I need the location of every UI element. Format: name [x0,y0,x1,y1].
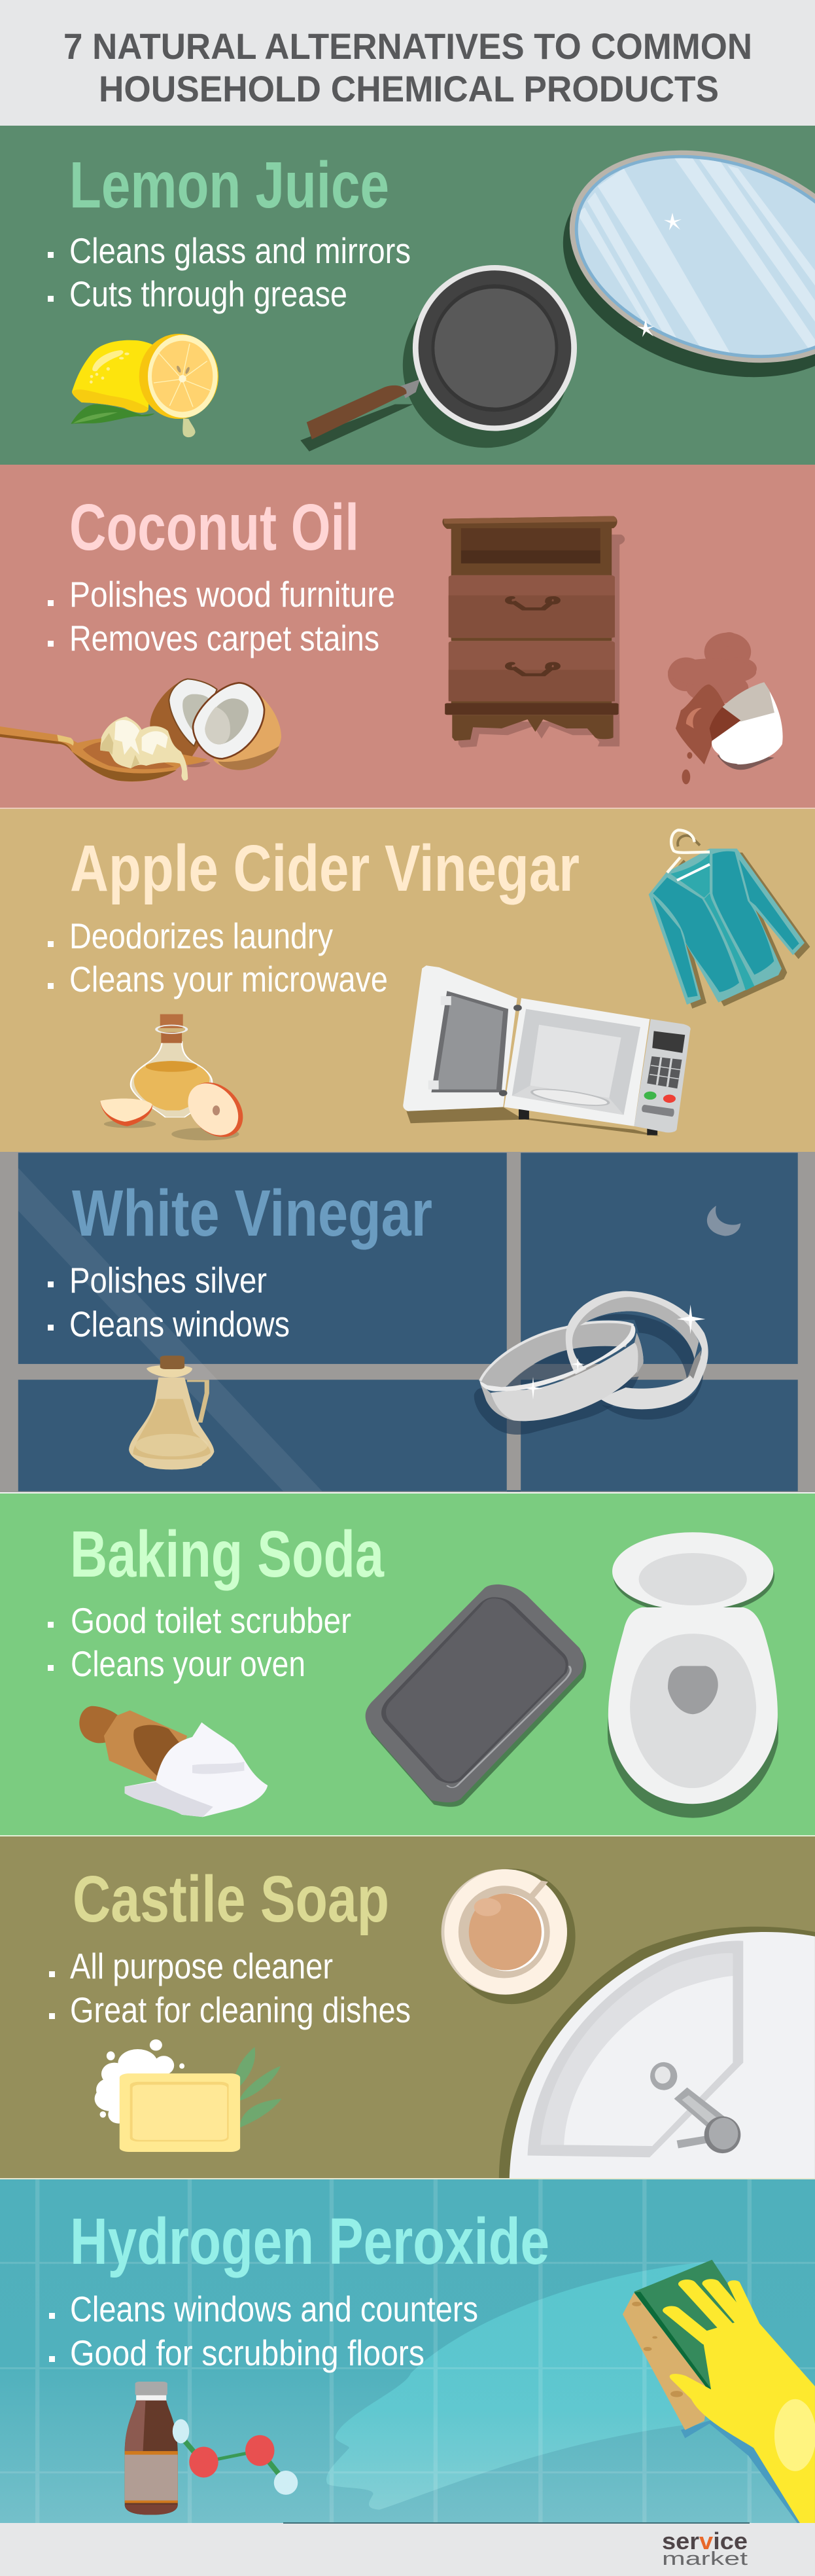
heading: coconut oil: Coconut Oil [69,491,359,564]
logo: service market [662,2528,748,2569]
bullet list: baking soda: Good toilet scrubber [71,1600,351,1641]
logo: service market: service [662,2528,748,2554]
bullet list: apple cider vinegar [48,916,388,999]
icon: mirror [563,151,815,377]
icon: sink and faucet [499,1927,815,2179]
bullet list: castile soap: Great for cleaning dishes [70,1990,411,2030]
panel: lemon juice [0,114,815,465]
bullet list: lemon juice: Cuts through grease [69,274,347,314]
bullet list: white vinegar [48,1260,290,1344]
bullet list: baking soda: Cleans your oven [71,1643,305,1684]
sparkles [523,1304,705,1399]
icon: hanging jacket [649,830,810,1009]
icon: soap bar with foam and leaves [95,2039,282,2152]
bullet list: coconut oil: Removes carpet stains [69,618,379,658]
icon: coconut and spoon [0,679,281,781]
bullet list: white vinegar: Cleans windows [69,1304,290,1344]
icon: molecule [173,2419,298,2495]
title: 7 NATURAL ALTERNATIVES TO COMMON [63,26,752,67]
bullet list: apple cider vinegar: Deodorizes laundry [69,916,333,956]
icon: cider vinegar bottle and apples [100,1014,251,1140]
icon: coffee cup on saucer [442,1869,576,2004]
footer band [0,2522,815,2576]
bullet list: hydrogen peroxide: Cleans windows and counters [70,2289,478,2329]
bullet list: castile soap [49,1946,411,2030]
sparkles [637,213,682,337]
wall tile grid [0,2179,815,2523]
panel: castile soap [0,1836,815,2179]
heading: lemon juice: Lemon Juice [69,149,389,222]
icon: peroxide bottle [125,2382,178,2515]
heading: white vinegar: White Vinegar [72,1177,432,1250]
icon: oven tray [366,1584,586,1807]
bullet list: coconut oil [48,574,395,658]
icon: scoop and baking soda [79,1706,268,1817]
icon: toilet [608,1532,778,1818]
icon: open microwave [403,965,691,1136]
heading: apple cider vinegar: Apple Cider Vinegar [70,832,580,905]
bullet list: hydrogen peroxide: Good for scrubbing floors [70,2333,425,2373]
icon: white vinegar cruet [129,1355,214,1470]
panel: baking soda [0,1492,815,1836]
bullet list: lemon juice [48,230,411,314]
icon: sponge and yellow glove [623,2260,815,2524]
bullet list: hydrogen peroxide [49,2289,478,2373]
icon: silver rings [474,1291,708,1435]
bullet list: coconut oil: Polishes wood furniture [69,574,395,615]
bullet list: baking soda [48,1600,351,1684]
icon: crescent moon [707,1206,740,1236]
bullet list: apple cider vinegar: Cleans your microwave [69,959,388,999]
heading: castile soap: Castile Soap [73,1863,389,1936]
icon: lemon [71,334,218,437]
heading: baking soda: Baking Soda [70,1518,385,1591]
icon: dresser [442,516,625,747]
icon: wiped streak [326,2262,712,2510]
header band [0,0,815,126]
icon: spilled coffee cup [668,632,783,784]
title: HOUSEHOLD CHEMICAL PRODUCTS [99,68,719,109]
panel: white vinegar [0,1152,815,1494]
heading: hydrogen peroxide: Hydrogen Peroxide [70,2205,549,2278]
panel: coconut oil [0,465,815,809]
title [63,26,752,109]
logo: service market: market [662,2549,748,2569]
panel: apple cider vinegar [0,809,815,1152]
panel: hydrogen peroxide [0,2178,815,2524]
bullet list: castile soap: All purpose cleaner [70,1946,333,1986]
bullet list: white vinegar: Polishes silver [69,1260,267,1300]
icon: frying pan [300,265,577,452]
bullet list: lemon juice: Cleans glass and mirrors [69,230,411,271]
